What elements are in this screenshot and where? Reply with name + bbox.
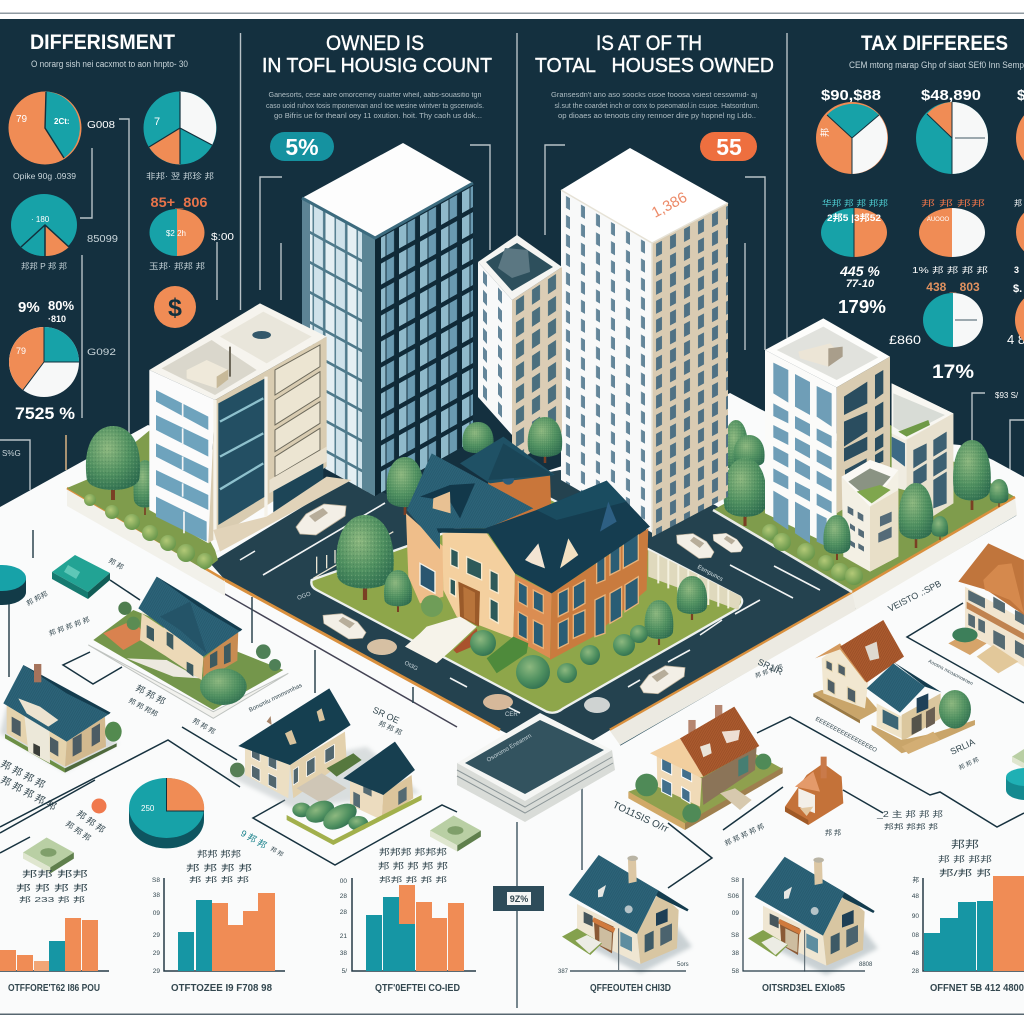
scattered small labels: 邦 邦 邦 邦 邦 xyxy=(48,615,91,638)
scattered small labels: 邦 邦 邦 xyxy=(64,818,93,843)
scattered small labels: 邦 邦 xyxy=(107,556,125,572)
pie R3 xyxy=(1016,102,1024,174)
windows cream xyxy=(450,548,498,623)
bar chart 1 xyxy=(0,869,109,994)
main house xyxy=(405,453,650,673)
right face xyxy=(652,203,728,537)
figures: 438 _ 803 xyxy=(926,280,980,294)
pie 5 labels: G092 xyxy=(87,347,116,357)
scattered small labels: 邦 邦 邦 邦 xyxy=(754,662,784,680)
heading: DIFFERISMENT xyxy=(30,31,175,54)
chart notes: 邦邦 邦邦 xyxy=(197,849,242,859)
chart notes: 邦邦 邦 邦 邦 xyxy=(379,875,447,884)
heading: TAX DIFFEREES xyxy=(861,32,1008,55)
scattered small labels: SR OE xyxy=(371,705,401,726)
percent figures: 9% xyxy=(18,299,40,316)
scattered small labels: 9 邦 邦 xyxy=(239,827,269,851)
figures: $93 S/ xyxy=(995,391,1019,400)
scattered small labels: 邦 邦 邦邦 xyxy=(127,696,159,719)
road labels: Esmpuncs xyxy=(696,564,724,583)
annex xyxy=(350,778,383,820)
chart 4 axis and caption: 387 xyxy=(558,969,569,975)
small rear tower xyxy=(478,235,562,465)
scattered small labels: SRLIA xyxy=(949,737,976,757)
y axis labels: 5/ xyxy=(342,968,347,975)
rear wing xyxy=(460,437,555,530)
orange figure: 85+_806 xyxy=(150,194,208,210)
dark header panel xyxy=(0,19,1024,579)
pie 4 xyxy=(149,209,204,256)
cylinder right xyxy=(1006,768,1024,800)
wing xyxy=(892,383,953,533)
car 5 xyxy=(713,533,743,552)
chart 5 axis and caption: 09 xyxy=(732,910,739,917)
section: owned share xyxy=(262,32,492,161)
left face xyxy=(561,190,652,533)
figures: 445 % xyxy=(839,263,880,279)
balconies xyxy=(275,345,320,477)
road labels: OGO xyxy=(297,591,312,602)
pie R4 xyxy=(821,208,887,257)
figures: 3 xyxy=(1014,265,1019,275)
chart notes: 邦邦 邦邦 xyxy=(22,869,89,879)
roof xyxy=(302,143,473,238)
dark main roof xyxy=(485,481,650,593)
stack label: Osoromo Eneamrn xyxy=(486,733,533,764)
y axis labels: 48 xyxy=(912,893,919,900)
forecourt xyxy=(297,773,347,803)
chart 5 axis and caption: 58 xyxy=(732,968,739,975)
house chart A xyxy=(562,855,692,973)
badge 5% xyxy=(270,132,334,161)
roof xyxy=(478,235,562,300)
centre label box: 9Z% xyxy=(510,894,528,904)
badge 55: 55 xyxy=(716,134,742,160)
pie 4 labels xyxy=(149,232,235,271)
central lot xyxy=(311,437,742,713)
chart notes xyxy=(938,838,992,878)
house: centre left big xyxy=(227,688,422,845)
pie labels row 2: 邦 邦 邦邦 xyxy=(921,198,985,208)
fence right xyxy=(648,550,742,610)
right lot trees and hedges xyxy=(762,440,1008,585)
panel dividers and leader lines xyxy=(0,33,1024,490)
icon: dollar coin xyxy=(154,286,196,328)
chart notes: 邦 邦 邦邦 xyxy=(938,854,992,864)
windows brick xyxy=(518,533,638,648)
roof xyxy=(765,318,890,387)
scattered small labels: _2 主 邦 邦 邦 xyxy=(876,809,943,819)
pie labels row 2: 邦 xyxy=(1014,198,1022,208)
chart 4 axis and caption: QFFEOUTEH CHI3D xyxy=(590,983,671,994)
scattered small labels: VEISTO .:SPB xyxy=(886,578,943,614)
pie 3 labels: 85099 xyxy=(87,234,118,245)
central trees behind house xyxy=(336,457,423,612)
brick side xyxy=(550,528,648,660)
house: right edge orange xyxy=(948,543,1024,673)
caption: OTFFORE'T62 I86 POU xyxy=(8,983,100,994)
pie 4 labels: 玉邦· 邦邦 邦 xyxy=(149,261,205,271)
chart notes: 邦 233 邦 邦 xyxy=(19,895,85,904)
white isometric ground xyxy=(0,393,1024,1013)
left wing wall xyxy=(406,513,443,603)
scattered small labels: TO11SIS O/rr xyxy=(611,800,671,835)
road edge: right xyxy=(610,592,853,730)
paragraph: caso uoid ruhox tosis mponenvan ancl toe wesine wintver ta gscenwols. xyxy=(266,103,484,110)
pie R5 xyxy=(919,208,985,257)
y axis labels: 29 xyxy=(153,950,160,957)
orange dot xyxy=(92,798,106,814)
rooftop unit xyxy=(187,347,230,388)
caption: OTFTOZEE I9 F708 98 xyxy=(171,983,272,994)
chart 4 axis and caption: 5ors xyxy=(677,962,689,968)
paragraph xyxy=(551,92,760,120)
y axis labels: 28 xyxy=(912,968,919,975)
bar chart 6 xyxy=(912,838,1024,994)
scattered small labels: 邦 邦 邦 xyxy=(957,756,980,772)
pie R8 xyxy=(1015,290,1024,350)
y axis labels xyxy=(152,877,160,975)
pie 5: 79 xyxy=(16,346,26,356)
caption: QTF'0EFTEI CO-IED xyxy=(375,983,460,994)
left face xyxy=(765,350,837,548)
chart notes: 邦邦 xyxy=(951,838,979,851)
steps xyxy=(977,645,1018,673)
3D pie chart xyxy=(129,778,204,848)
pie R6 xyxy=(1016,205,1024,259)
corner block xyxy=(842,460,898,572)
banknote teal xyxy=(52,555,110,599)
y axis labels: 28 xyxy=(340,893,347,900)
dark glass tower xyxy=(302,143,473,496)
pie 1 xyxy=(8,92,82,164)
main roof xyxy=(238,688,351,765)
chart 5 axis and caption: S06 xyxy=(727,893,739,900)
scattered small labels: 邦邦 邦邦 邦 xyxy=(884,822,938,831)
house: centre lower brown roof xyxy=(628,705,783,830)
banknote far right xyxy=(1012,743,1024,775)
right face xyxy=(375,183,473,496)
left mid-rise building xyxy=(149,303,352,552)
scattered small labels: Bonsmlu rnmmnmhas xyxy=(248,683,303,714)
chart notes: 邦邦邦 邦邦邦 xyxy=(379,847,448,857)
car 3 xyxy=(640,666,685,694)
scattered small labels: 邦 邦 邦 xyxy=(191,716,217,736)
entry steps xyxy=(405,617,480,663)
scattered small labels: 邦 邦 xyxy=(269,845,285,859)
road network xyxy=(208,470,856,760)
y axis labels: 21 xyxy=(340,933,347,940)
y axis labels: 90 xyxy=(912,913,919,920)
chart 5 axis and caption: 8808 xyxy=(859,962,873,968)
pie 3 labels xyxy=(21,234,118,271)
figures xyxy=(838,263,1024,400)
pie 4 labels: $:00 xyxy=(211,232,235,243)
figures: £860 xyxy=(889,333,921,347)
scattered small labels: 邦 邦 邦 xyxy=(75,808,107,835)
y axis labels: 48 xyxy=(912,950,919,957)
white tower xyxy=(561,148,728,537)
cars xyxy=(296,504,743,694)
dollar figures: $48,890 xyxy=(921,87,981,104)
heading line 2: TOTAL HOUSES OWNED xyxy=(535,55,774,77)
road markings xyxy=(208,503,820,713)
pie 3: · 180 xyxy=(31,215,50,224)
pie 5 xyxy=(9,327,79,397)
y axis labels: 38 xyxy=(153,892,160,899)
heading: IS AT OF TH xyxy=(596,32,702,55)
scattered small labels: 邦 邦 邦 邦 邦 xyxy=(0,773,59,813)
document stack xyxy=(457,713,615,822)
section: differisment xyxy=(2,31,235,458)
percent figures: ·810 xyxy=(48,314,66,324)
pie 1 labels: G008 xyxy=(87,120,115,131)
rooftop unit xyxy=(798,343,843,367)
chart notes: 邦 邦 邦 邦 邦 xyxy=(378,861,449,871)
y axis labels: 29 xyxy=(153,968,160,975)
lower connector lines xyxy=(0,515,1024,1008)
road side strip xyxy=(610,593,856,745)
right platform xyxy=(713,418,1017,610)
dollar figures xyxy=(821,87,1024,104)
pie R1: 邦 xyxy=(819,128,830,137)
y axis labels: 38 xyxy=(340,950,347,957)
chart 5 axis and caption xyxy=(727,877,873,994)
paragraph: Gransesdn't ano aso soocks cisoe fooosa vsiest cesswmid- aj xyxy=(551,92,757,99)
house chart B xyxy=(748,857,878,975)
planter xyxy=(948,633,987,655)
chart notes: 邦 邦 邦 邦 xyxy=(186,863,253,873)
figures: 1% 邦 邦 邦 邦 xyxy=(912,265,988,275)
y axis labels xyxy=(912,875,920,975)
central bushes xyxy=(421,576,707,689)
lawn xyxy=(311,497,742,713)
pie labels row 2 xyxy=(822,198,1022,208)
scattered small labels: 邦 邦 邦 邦 xyxy=(0,757,47,791)
house: upper left xyxy=(88,577,288,718)
left face xyxy=(302,198,375,496)
banknote right xyxy=(430,816,481,852)
paragraph: go Bifris ue for theanl oey 11 oxution. hoit. Thy caoh us dok... xyxy=(274,113,482,120)
scattered small labels: SR1IR xyxy=(756,657,785,677)
scattered small labels: 邦 邦 邦 xyxy=(377,719,404,737)
left roof xyxy=(407,453,533,549)
badge 55 xyxy=(700,132,757,161)
chart 5 axis and caption: S8 xyxy=(731,932,739,939)
pie 5 labels: S%G xyxy=(2,449,21,458)
bottom rule xyxy=(0,1014,1024,1015)
pie labels row 2: 华邦 邦 邦 邦邦 xyxy=(822,198,888,208)
chart notes: 邦 邦 邦 邦 xyxy=(16,883,89,893)
pie 1 labels: Opike 90g .0939 xyxy=(13,171,76,181)
pie 2 xyxy=(144,92,216,164)
cream gable xyxy=(442,528,515,638)
pie 1 labels xyxy=(13,120,115,181)
pie R5: AUOOO xyxy=(927,217,949,223)
section: total houses xyxy=(535,32,774,161)
heading: OWNED IS xyxy=(326,32,424,55)
hedges xyxy=(292,796,368,835)
scattered small labels xyxy=(0,556,980,859)
main walls xyxy=(245,743,290,798)
chart 5 axis and caption: 38 xyxy=(732,950,739,957)
pie 3 labels: 邦邦 P 邦 邦 xyxy=(21,261,67,271)
pie 3 xyxy=(11,194,77,256)
house: left edge xyxy=(0,664,122,773)
pie 5 labels xyxy=(2,347,116,458)
badge 5%: 5% xyxy=(285,134,319,160)
entrance steps xyxy=(213,477,352,552)
3D pie chart: 250 xyxy=(141,804,155,813)
road tokens xyxy=(367,639,610,713)
right face glass xyxy=(208,337,327,543)
heading line 2: IN TOFL HOUSIG COUNT xyxy=(262,55,492,77)
top rule xyxy=(0,12,1024,14)
car 4 xyxy=(676,534,714,558)
pie 5 labels: 7525 % xyxy=(15,404,75,423)
pie 1: 79 xyxy=(16,114,28,125)
rooftop unit xyxy=(498,248,530,278)
roof dormers xyxy=(525,502,617,568)
chart notes xyxy=(378,847,449,884)
scattered small labels: 邦 邦 邦 xyxy=(134,682,167,707)
figures: $. xyxy=(1013,283,1022,295)
y axis labels xyxy=(340,878,347,975)
road edge: left xyxy=(225,580,500,730)
percent figures: 80% xyxy=(48,298,74,313)
right main building xyxy=(765,318,953,572)
percent figures xyxy=(18,298,74,324)
dormer xyxy=(420,483,475,518)
dollar figures: $90,$88 xyxy=(821,87,881,104)
trees behind right building xyxy=(724,420,766,526)
scattered small labels: 邦 邦 邦 邦 邦 xyxy=(723,822,766,848)
pie R1 xyxy=(816,102,888,174)
chart notes xyxy=(16,869,89,904)
house: right double xyxy=(813,620,975,754)
tree left xyxy=(86,426,156,515)
scattered small labels: 邦 邦邦 xyxy=(25,589,49,608)
centre label box xyxy=(493,886,544,911)
chart notes xyxy=(186,849,253,884)
car 1 xyxy=(296,504,346,535)
y axis labels: 09 xyxy=(153,910,160,917)
chart 4 axis and caption xyxy=(558,962,689,994)
section: tax differences xyxy=(816,32,1024,400)
roof figure: 1,386 xyxy=(649,189,690,222)
road labels: Ot3G xyxy=(403,660,419,673)
chart notes: 邦 邦 邦 邦 xyxy=(189,875,249,884)
bar chart 2 xyxy=(152,849,285,994)
chart 5 axis and caption: S8 xyxy=(731,877,739,884)
figures: 77-10 xyxy=(846,278,875,290)
banknote left xyxy=(23,838,74,874)
pie 2: 7 xyxy=(154,116,160,128)
left platform xyxy=(67,430,225,596)
scattered small labels: 邦 邦 xyxy=(825,828,841,837)
bar chart 3 xyxy=(340,847,476,994)
paragraph xyxy=(266,92,484,120)
y axis labels: S8 xyxy=(152,877,160,884)
pie 1: 2Ct: xyxy=(54,117,70,126)
low hedge xyxy=(487,637,528,673)
scattered small labels: EEEEEEEEEEEEEEEEO xyxy=(814,716,878,754)
fence left xyxy=(313,532,393,578)
pie R2 xyxy=(916,102,988,174)
figures: 179% xyxy=(838,297,886,317)
left face xyxy=(149,370,215,543)
paragraph: sl.sut the coardet inch or conx to pseomatol.in csuoe. Hatsordrum. xyxy=(554,103,760,110)
y axis labels: 29 xyxy=(153,932,160,939)
paragraph: op dioaes ao tenoots ciny rennoer dire py hopnel ng Lido.. xyxy=(558,113,756,120)
pie 2 label: 非邦· 翌 邦珍 邦 xyxy=(146,171,214,181)
pie R4: 2邦5 |3邦52 xyxy=(827,212,881,223)
paragraph: Ganesorts, cese aare omorcemey ouarter wheil, aabs-souasitio tgn xyxy=(268,92,482,99)
door xyxy=(458,582,480,627)
garden xyxy=(103,602,200,678)
subheading: O norarg sish nei cacxmot to aon hnpto- 30 xyxy=(31,59,188,69)
trees between towers xyxy=(462,417,562,463)
y axis labels: 08 xyxy=(912,932,919,939)
pie 4: $2 2h xyxy=(166,229,186,238)
pie R7 xyxy=(923,293,983,347)
right face xyxy=(837,357,890,513)
chart 5 axis and caption: OITSRD3EL EXIo85 xyxy=(762,983,845,994)
brick front xyxy=(513,575,552,658)
scattered small labels: Aoosns mcoaonnenen xyxy=(927,658,974,687)
y axis labels: 邦 xyxy=(912,875,920,884)
y axis labels: 28 xyxy=(340,909,347,916)
icon: dollar coin: $ xyxy=(168,294,182,322)
roof xyxy=(561,148,728,243)
cylinder left xyxy=(0,565,26,605)
annex teal xyxy=(877,703,902,738)
y axis labels: 00 xyxy=(340,878,347,885)
chart notes: 邦/邦 邦 xyxy=(939,868,992,878)
house: small orange cottage xyxy=(785,757,843,825)
road labels xyxy=(297,564,724,718)
figures: 17% xyxy=(932,362,974,383)
car 2 xyxy=(323,614,366,639)
road labels: CER xyxy=(505,712,518,718)
